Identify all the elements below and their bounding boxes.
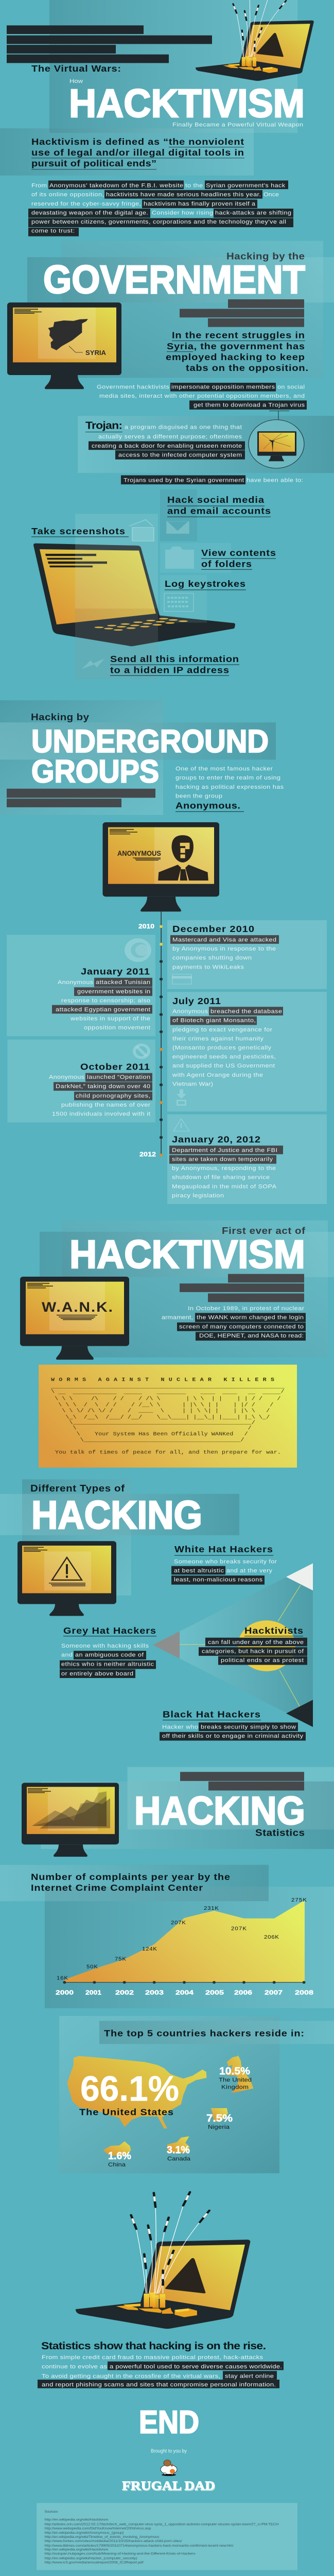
- stat: United States: The United States: [79, 2107, 173, 2117]
- panel: July 2011: Vietnam War): [172, 1080, 213, 1087]
- panel: January 2011: attacked Egyptian government: [56, 1006, 151, 1013]
- redacted bars: [7, 25, 212, 63]
- panel: October 2011: 1500 individuals involved with it: [52, 1110, 151, 1117]
- label: Log keystrokes: [165, 579, 245, 589]
- type: grey hat hackers: ethics who is neither altruistic: [61, 1660, 154, 1667]
- icon: black triangle: [286, 1700, 313, 1727]
- panel: January 2011: government websites in: [77, 988, 150, 995]
- area chart: 50K: [86, 1964, 98, 1970]
- area chart: 207K: [231, 1926, 247, 1931]
- panel: July 2011: engineered seeds and pesticides,: [172, 1053, 276, 1060]
- Trojan text: a program disguised as one thing that: [125, 423, 242, 431]
- panel: December 2010: December 2010: [172, 924, 254, 934]
- area chart: 2003: [145, 1989, 164, 1996]
- intro paragraph: Consider how rising: [152, 209, 213, 216]
- year label 2010: 2010: [138, 923, 154, 930]
- panel: sources: http://articles.cnn.com/2012-02-17/tech/tech_web_computer-virus-syria_1_opposition-activists-computer-viruses-syrian-town/2?_s=PM:TECH: [44, 2522, 279, 2526]
- paragraph: One of the most famous hacker: [175, 765, 273, 772]
- label: Hack social media: [167, 495, 265, 505]
- area chart: 2006: [234, 1989, 252, 1996]
- ascii banner: \_________________________________________________/: [51, 1420, 255, 1426]
- intro paragraph: hacktivism has finally proven itself a: [144, 200, 255, 207]
- end title: END: [139, 2404, 199, 2441]
- ascii banner: \ Your System Has Been Officially WANKed /: [51, 1432, 248, 1437]
- panel: January 20, 2012: shutdown of file sharing service: [172, 1174, 270, 1181]
- panel: View contents of folders: [160, 543, 276, 573]
- panel: January 2011: attacked Tunisian: [96, 979, 150, 986]
- icon: lightning and send label: [82, 654, 239, 676]
- paragraph: [175, 765, 284, 812]
- panel: sources: [37, 2503, 297, 2570]
- stat: Canada: 3.1%: [167, 2144, 190, 2156]
- panel: July 2011: pledging to exact vengeance for: [172, 1026, 272, 1033]
- panel: sources: http://en.wikipedia.org/wiki/Anonymous_(group): [44, 2531, 124, 2535]
- panel: sources: http://en.wikipedia.org/wiki/Timeline_of_events_involving_Anonymous: [44, 2535, 160, 2539]
- icon: keyboard: [164, 593, 194, 612]
- diagram: hacker types triangle: [153, 1563, 313, 1727]
- panel: October 2011: child pornography sites,: [76, 1092, 150, 1099]
- type: white hat hackers: White Hat Hackers: [174, 1544, 273, 1554]
- panel: January 2011: Anonymous: [58, 979, 93, 986]
- subtitle: Finally Became a Powerful Virtual Weapon: [172, 121, 303, 128]
- type: white hat hackers: [171, 1544, 277, 1585]
- type: grey hat hackers: [60, 1625, 156, 1678]
- icon: screenshot pictures: [129, 520, 154, 541]
- paragraph: hacking as political expression has: [175, 784, 284, 790]
- panel: Log keystrokes: [160, 575, 246, 623]
- paragraph: on social: [277, 383, 305, 390]
- heading: Statistics: Statistics: [255, 1828, 305, 1838]
- panel: top 5 countries: [59, 2016, 334, 2173]
- ascii banner: \ /: [51, 1389, 285, 1395]
- statement: In the recent struggles in: [172, 330, 305, 340]
- panel: sources: http://www.forbes.com/sites/mobiledia/2011/10/25/hackers-attack-child-porn-sites/: [44, 2539, 182, 2543]
- panel: sources: http://www.ibtimes.com/articles/179905/20110714/anonymous-hackers-hack-monsanto-confirmed-recent-new.htm: [44, 2544, 234, 2548]
- title section: [0, 0, 314, 176]
- panel: sources: http://www.webopedia.com/DidYouKnow/Internet/2004/virus.asp: [44, 2527, 151, 2530]
- heading: Hacking by: [31, 713, 89, 723]
- definition statement: pursuit of political ends”: [31, 158, 156, 168]
- Trojan term: Trojan:: [85, 419, 122, 431]
- panel: October 2011: [7, 1040, 155, 1123]
- panel: January 20, 2012: Department of Justice and the FBI: [172, 1147, 277, 1154]
- type: white hat hackers: and at the very: [226, 1567, 272, 1574]
- icon: cracked monitor in circle: [249, 411, 304, 468]
- closing statement: Statistics show that hacking is on the rise.: [41, 2340, 266, 2352]
- Trojan text: actually serves a different purpose; oftentimes: [98, 433, 242, 440]
- panel: sources: http://en.wikipedia.org/wiki/Hacktivism: [44, 2518, 109, 2521]
- paragraph: screen of many computers connected to: [179, 1323, 304, 1330]
- area chart: 206K: [264, 1935, 279, 1940]
- stat: China: 1.6%: [108, 2149, 131, 2162]
- paragraph: In October 1989, in protest of nuclear: [188, 1305, 304, 1312]
- paragraph: Government hacktivists: [97, 383, 169, 390]
- ascii banner: \_\ /__\ /___/ /__/ \__\____| |__\_| |____| |_\ \_/: [51, 1415, 270, 1420]
- heading: Different Types of: [30, 1484, 125, 1494]
- stat: United Kingdom: Kingdom: [221, 2083, 249, 2090]
- type: hacktivists: [199, 1625, 307, 1665]
- Trojan capability lead-in: have been able to:: [247, 477, 303, 484]
- ascii banner: ________________________________________________________________: [50, 1384, 285, 1389]
- intro paragraph: devastating weapon of the digital age.: [31, 209, 148, 216]
- paragraph: armament,: [162, 1314, 193, 1321]
- icon: laptop launching rockets (closing): [76, 2192, 250, 2329]
- definition statement: Hacktivism is defined as “the nonviolent: [31, 137, 244, 147]
- type: grey hat hackers: Grey Hat Hackers: [63, 1625, 156, 1636]
- ascii banner: __ ____________ _____ ________ ____ ____ __ _____: [51, 1390, 281, 1396]
- icon: credit card: [172, 974, 191, 984]
- panel: January 20, 2012: piracy legislation: [172, 1192, 224, 1199]
- Trojan capability lead-in: Trojans used by the Syrian government: [124, 477, 244, 484]
- label: of folders: [201, 558, 252, 569]
- closing statement: To avoid getting caught in the crossfire of the virtual wars,: [42, 2372, 220, 2379]
- section: hacking by the government: [7, 241, 334, 410]
- area chart: [56, 1897, 313, 1996]
- area chart: 2005: [205, 1989, 224, 1996]
- closing statement: a powerful tool used to serve diverse causes worldwide.: [110, 2363, 282, 2370]
- type: hacktivists: political ends or as protest: [221, 1657, 304, 1664]
- section: Anonymous timeline: [7, 911, 327, 1204]
- Trojan text: creating a back door for enabling unseen remote: [92, 443, 242, 449]
- panel: July 2011: with Agent Orange during the: [172, 1072, 263, 1078]
- statement: Syria, the government has: [167, 341, 305, 351]
- panel: December 2010: [167, 920, 327, 989]
- label: and email accounts: [167, 505, 271, 516]
- heading: Hacking by the: [226, 252, 305, 262]
- type: grey hat hackers: an ambiguous code of: [75, 1651, 144, 1658]
- stat: Canada: Canada: [167, 2155, 190, 2162]
- heading: First ever act of: [222, 1226, 306, 1236]
- ascii banner: [50, 1377, 285, 1455]
- title: HACKING: HACKING: [31, 1493, 202, 1537]
- icon: laptop launching rockets: [196, 0, 314, 81]
- title: How: How: [69, 78, 83, 84]
- redacted bars: [180, 1274, 304, 1302]
- closing statement: stay alert online: [225, 2372, 274, 2379]
- definition statement: use of legal and/or illegal digital tools in: [31, 147, 244, 158]
- closing statement: [38, 2340, 284, 2388]
- area chart: 124K: [142, 1946, 157, 1952]
- panel: January 2011: [7, 935, 155, 1036]
- type: grey hat hackers: Someone with hacking skills: [61, 1642, 149, 1649]
- panel: October 2011: DarkNet,” taking down over 40: [56, 1083, 150, 1090]
- closing statement: From simple credit card fraud to massive political protest, hack-attacks: [42, 2354, 263, 2361]
- redacted bars: [7, 789, 155, 807]
- area chart: 2007: [265, 1989, 283, 1996]
- stat: United States: 66.1%: [80, 2069, 179, 2108]
- icon: grey triangle: [153, 1631, 180, 1658]
- icon: no symbol: [134, 1045, 149, 1058]
- type: white hat hackers: Someone who breaks security for: [174, 1558, 277, 1565]
- panel: July 2011: Anonymous: [172, 1008, 208, 1014]
- ascii banner: \___________________________________________/: [51, 1437, 244, 1443]
- panel: sources: Sources: [44, 2510, 58, 2514]
- type: grey hat hackers: or entirely above board: [61, 1670, 133, 1677]
- paragraph: [162, 1305, 306, 1341]
- panel: July 2011: [167, 992, 327, 1112]
- ascii banner: W O R M S A G A I N S T N U C L E A R K I L L E R S: [51, 1377, 274, 1383]
- Trojan text: [89, 423, 245, 460]
- section: hacking statistics: [22, 1767, 334, 1857]
- icon: Tunisia emblem: [125, 938, 151, 962]
- intro paragraph: Syrian government's hack: [206, 182, 285, 189]
- icon: download to computer: [177, 1089, 186, 1106]
- type: white hat hackers: at best altruistic: [174, 1567, 224, 1574]
- chart heading: Number of complaints per year by the: [31, 1872, 230, 1882]
- panel: October 2011: October 2011: [80, 1062, 150, 1072]
- panel: complaints chart: [0, 1865, 334, 2008]
- area chart: 231K: [204, 1905, 219, 1911]
- panel: WANK login screen: [39, 1365, 297, 1468]
- intro paragraph: hacktivists have made serious headlines this year.: [106, 191, 261, 198]
- area chart: 2002: [115, 1989, 134, 1996]
- intro paragraph: [28, 180, 293, 236]
- area chart: 16K: [57, 1975, 68, 1981]
- label: [201, 548, 276, 570]
- definition statement: [31, 137, 244, 170]
- panel: January 20, 2012: sites are taken down temporarily: [172, 1156, 273, 1162]
- icon: monitor with Syria map: [7, 302, 121, 389]
- intro paragraph: of its online opposition,: [31, 191, 104, 198]
- icon: envelope: [166, 521, 189, 534]
- icon: laptop with screenshot panel: [33, 514, 235, 679]
- icon: monitor with W.A.N.K.: [20, 1277, 129, 1360]
- panel: Hack social media: [160, 489, 271, 541]
- panel: sources: http://en.wikipedia.org/wiki/Hacktivism: [44, 2548, 109, 2552]
- icon: monitor with Syria map: SYRIA: [85, 349, 106, 357]
- panel: January 20, 2012: January 20, 2012: [172, 1134, 260, 1144]
- intro paragraph: reserved for the cyber-savvy fringe,: [31, 200, 141, 207]
- ascii banner: \ \ \ / \ / / / /__\ \ | |\ \ | | | |/ / /: [51, 1402, 274, 1408]
- Trojan text: access to the infected computer system: [118, 451, 242, 458]
- logo text: FRUGAL DAD: FRUGAL DAD: [122, 2480, 216, 2494]
- type: black hat hackers: Black Hat Hackers: [163, 1709, 260, 1719]
- ascii banner: \ \ \/ /\ \/ / / ____ \ | | \ \| | | |\ \ /: [51, 1409, 270, 1414]
- area chart: 2001: [85, 1989, 101, 1996]
- label: [167, 495, 271, 517]
- intro paragraph: hack-attacks are shifting: [215, 209, 291, 216]
- paragraph: media sites, interact with other potential opposition members, and: [99, 393, 305, 399]
- type: white hat hackers: least, non-malicious reasons: [174, 1576, 262, 1583]
- icon: warning outline: [173, 1119, 189, 1131]
- redacted bars: [180, 299, 304, 327]
- year label 2012: 2012: [139, 1151, 156, 1158]
- section: first act of hacktivism: [20, 1221, 334, 1360]
- area chart: 75K: [115, 1956, 127, 1962]
- statement: employed hacking to keep: [166, 352, 305, 362]
- stat: China: [108, 2149, 131, 2168]
- stat: United Kingdom: [219, 2065, 252, 2090]
- panel: sources: http://outspan.hubpages.com/hub/Meaning-of-Hacking-and-the-Different-Kinds-of-Hackers: [44, 2552, 196, 2555]
- ascii banner: \ /: [51, 1426, 252, 1431]
- panel: January 2011: websites in support of the: [70, 1015, 150, 1022]
- intro paragraph: come to trust:: [31, 227, 75, 234]
- panel: January 2011: opposition movement: [84, 1024, 151, 1031]
- paragraph: groups to enter the realm of using: [175, 774, 280, 781]
- redacted bars: [180, 1772, 304, 1790]
- section: different types of hacking: [0, 1479, 239, 1616]
- panel: December 2010: companies shutting down: [172, 954, 252, 961]
- statement: [166, 330, 308, 373]
- heading: The top 5 countries hackers reside in:: [104, 2028, 304, 2038]
- stat: United Kingdom: The United: [219, 2076, 252, 2083]
- paragraph: impersonate opposition members: [171, 383, 275, 390]
- panel: October 2011: launched “Operation: [87, 1074, 150, 1080]
- type: hacktivists: can fall under any of the above: [208, 1639, 304, 1646]
- panel: December 2010: by Anonymous in response to the: [172, 945, 276, 952]
- paragraph: get them to download a Trojan virus: [194, 401, 305, 408]
- type: black hat hackers: breaks security simply to show: [201, 1723, 296, 1730]
- panel: sources: http://www.ic3.gov/media/annualreport/2008_IC3Report.pdf: [44, 2561, 144, 2564]
- kicker: The Virtual Wars: The Virtual Wars:: [31, 63, 121, 74]
- title: GROUPS: GROUPS: [31, 753, 159, 789]
- panel: October 2011: publishing the names of over: [61, 1101, 150, 1108]
- stat: Nigeria: Nigeria: [208, 2124, 230, 2130]
- ascii banner: \ \ \ /\ / / / /\ \ | \ \ | | | | / / /: [51, 1396, 281, 1402]
- paragraph: DOE, HEPNET, and NASA to read:: [199, 1332, 304, 1339]
- credit: Brought to you by: Brought to you by: [151, 2448, 187, 2454]
- type: grey hat hackers: and: [61, 1651, 73, 1658]
- panel: December 2010: Mastercard and Visa are attacked: [172, 936, 276, 943]
- panel: January 20, 2012: by Anonymous, responding to the: [172, 1165, 276, 1172]
- logo text: FRUGAL DAD: FRUGAL DAD: [122, 2479, 215, 2493]
- type: black hat hackers: off their skills or to engage in criminal activity: [162, 1733, 303, 1739]
- stat: Nigeria: [206, 2112, 233, 2130]
- panel: July 2011: July 2011: [172, 996, 221, 1006]
- statement: tabs on the opposition.: [186, 363, 308, 373]
- panel: July 2011: their crimes against humanity: [172, 1035, 263, 1042]
- stat: China: China: [108, 2161, 126, 2168]
- stat: Nigeria: 7.5%: [206, 2112, 233, 2124]
- area chart: 207K: [171, 1920, 186, 1926]
- intro paragraph: Anonymous' takedown of the F.B.I. website: [49, 182, 183, 189]
- icon: folder: [165, 547, 194, 569]
- paragraph: [97, 383, 307, 410]
- type: black hat hackers: Hacker who: [162, 1723, 198, 1730]
- panel: July 2011: (Monsanto produces genetically: [172, 1044, 271, 1051]
- panel: sources: http://en.wikipedia.org/wiki/Hacker_(computer_security): [44, 2556, 137, 2560]
- area chart: 2008: [295, 1989, 313, 1996]
- type: hacktivists: categories, but hack in pursuit of: [202, 1648, 304, 1654]
- stat: Canada: [167, 2144, 190, 2162]
- label: Take screenshots: Take screenshots: [31, 526, 125, 536]
- icon: lightning and send label: Send all this information: [110, 654, 239, 664]
- panel: July 2011: and supplied the US Government: [172, 1062, 275, 1069]
- type: hacktivists: Hacktivists: [244, 1625, 303, 1636]
- ascii banner: You talk of times of peace for all, and then prepare for war.: [55, 1450, 281, 1455]
- paragraph: been the group: [175, 792, 222, 799]
- area chart: 275K: [291, 1897, 307, 1903]
- chart heading: Internet Crime Complaint Center: [31, 1883, 203, 1893]
- intro paragraph: power between citizens, governments, corporations and the technology they've all: [31, 218, 286, 225]
- title: UNDERGROUND: UNDERGROUND: [31, 723, 269, 759]
- stat: United Kingdom: 10.5%: [219, 2065, 250, 2077]
- logo: Frugal Dad piggy bank: [161, 2460, 177, 2476]
- map: country shapes: [67, 2054, 254, 2156]
- area chart: 2004: [175, 1989, 194, 1996]
- icon: monitor with mountain chart: [22, 1783, 119, 1857]
- intro paragraph: to the: [185, 182, 203, 189]
- icon: monitor with anonymous figure: [103, 822, 219, 911]
- label: View contents: [201, 548, 276, 558]
- paragraph: the WANK worm changed the login: [197, 1314, 304, 1321]
- panel: July 2011: of Biotech giant Monsanto,: [172, 1017, 256, 1024]
- intro paragraph: Once: [263, 191, 279, 198]
- panel: October 2011: Anonymous: [49, 1074, 84, 1080]
- chart heading: [31, 1872, 230, 1893]
- panel: January 2011: response to censorship; also: [61, 997, 150, 1004]
- area chart: 2000: [56, 1989, 74, 1996]
- panel: January 20, 2012: Megaupload in the midst of SOPA: [172, 1183, 276, 1190]
- paragraph: Anonymous.: [175, 801, 240, 810]
- panel: July 2011: breached the database: [210, 1008, 282, 1014]
- icon: monitor with anonymous figure: ANONYMOUS: [117, 850, 161, 858]
- panel: December 2010: payments to WikiLeaks: [172, 963, 244, 970]
- icon: monitor with W.A.N.K.: W.A.N.K.: [42, 1299, 113, 1314]
- closing statement: continue to evolve as: [42, 2363, 107, 2370]
- timeline spine with event dots: [160, 911, 163, 1157]
- panel: January 2011: January 2011: [81, 967, 150, 976]
- icon: white triangle: [286, 1563, 313, 1590]
- Trojan capability lead-in: [121, 476, 303, 484]
- panel: January 20, 2012: [167, 1114, 327, 1204]
- panel: Trojan definition: [78, 411, 334, 473]
- icon: lightning and send label: to a hidden IP address: [110, 665, 229, 675]
- intro paragraph: From: [31, 182, 47, 189]
- type: black hat hackers: [160, 1709, 306, 1741]
- section: underground groups: [0, 700, 284, 911]
- closing statement: and report phishing scams and sites that compromise personal information.: [42, 2381, 276, 2388]
- icon: monitor with warning triangle: [17, 1541, 116, 1616]
